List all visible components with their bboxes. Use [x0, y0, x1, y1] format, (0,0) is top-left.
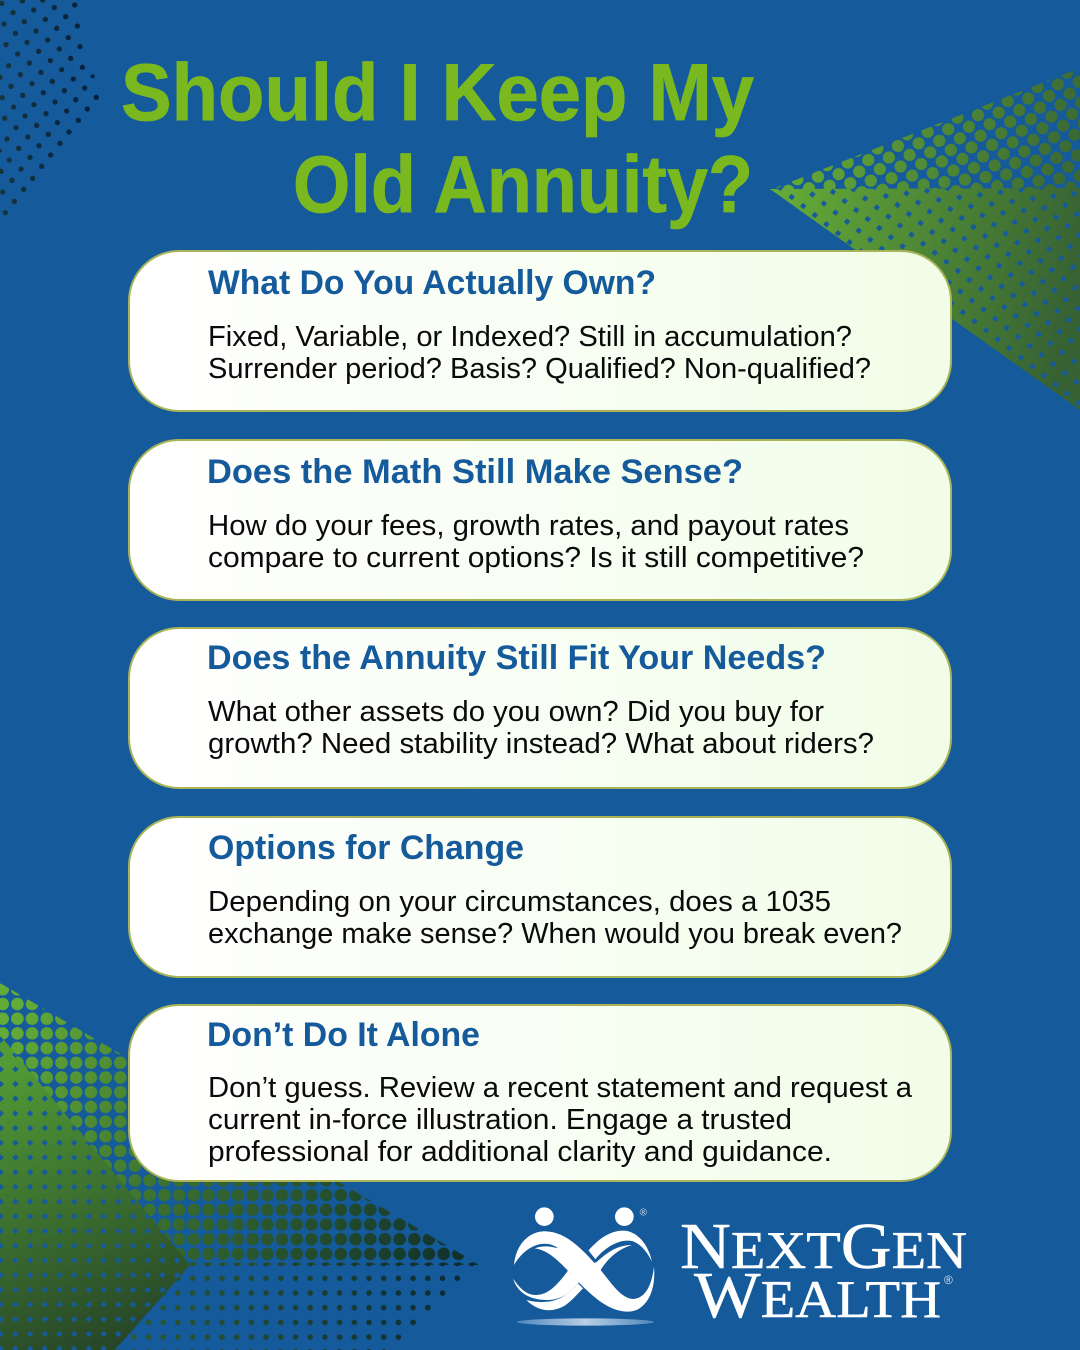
- icon: infinity figures: ®: [640, 1207, 648, 1218]
- title: Should I Keep My: [121, 48, 754, 138]
- body text: exchange make sense? When would you break even?: [208, 918, 902, 950]
- body text: [208, 510, 864, 574]
- wordmark: [680, 1210, 967, 1332]
- decoration: top-left dark dot cluster: [0, 0, 99, 215]
- decoration: top-right green halftone: [770, 68, 1080, 410]
- wordmark: WEALTH: [694, 1259, 941, 1332]
- body text: Surrender period? Basis? Qualified? Non-qualified?: [208, 353, 871, 385]
- body text: What other assets do you own? Did you buy for: [208, 696, 824, 728]
- body text: [208, 1072, 913, 1168]
- title: Old Annuity?: [293, 140, 753, 230]
- heading: Options for Change: [208, 829, 524, 867]
- wordmark: ®: [944, 1273, 953, 1287]
- panel: does the math still make sense: [129, 440, 951, 600]
- body text: [208, 696, 874, 760]
- body text: How do your fees, growth rates, and payout rates: [208, 510, 849, 542]
- body text: compare to current options? Is it still competitive?: [208, 542, 864, 574]
- panel: options for change: [129, 817, 951, 977]
- wordmark: NEXTGEN: [680, 1210, 967, 1283]
- panel: what do you actually own: [129, 251, 951, 411]
- body text: growth? Need stability instead? What about riders?: [208, 728, 874, 760]
- body text: [208, 886, 902, 950]
- body text: Don’t guess. Review a recent statement and request a: [208, 1072, 913, 1104]
- body text: [208, 321, 871, 385]
- heading: Don’t Do It Alone: [207, 1016, 480, 1054]
- body text: Fixed, Variable, or Indexed? Still in accumulation?: [208, 321, 852, 353]
- heading: What Do You Actually Own?: [208, 264, 656, 302]
- icon: infinity figures: [513, 1207, 654, 1326]
- body text: current in-force illustration. Engage a trusted: [208, 1104, 792, 1136]
- heading: Does the Math Still Make Sense?: [207, 453, 743, 491]
- body text: Depending on your circumstances, does a 1035: [208, 886, 831, 918]
- panel: don't do it alone: [129, 1005, 951, 1181]
- title: [121, 48, 754, 230]
- decoration: bottom-left green halftone: [0, 983, 480, 1350]
- heading: Does the Annuity Still Fit Your Needs?: [207, 639, 826, 677]
- body text: professional for additional clarity and guidance.: [208, 1136, 832, 1168]
- panel: does the annuity still fit your needs: [129, 628, 951, 788]
- logo: NextGen Wealth: [513, 1207, 967, 1332]
